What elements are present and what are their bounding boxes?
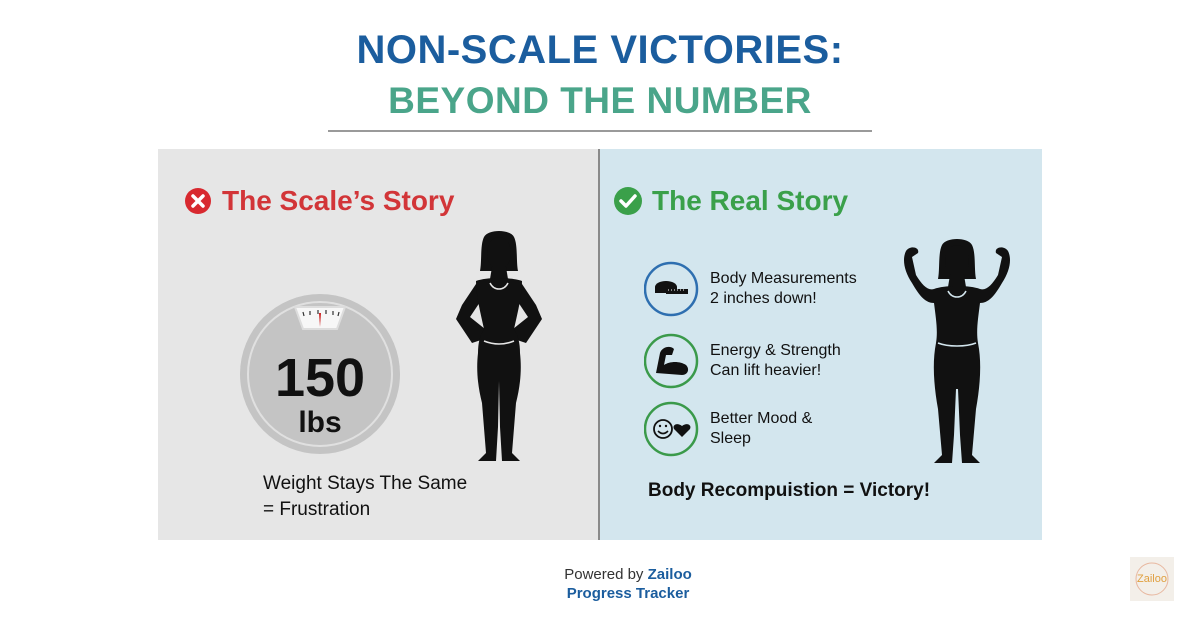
subtitle: BEYOND THE NUMBER [388,80,812,121]
footer: powered by [564,566,692,602]
panel: scale's story [158,149,598,540]
item: measurements [644,262,857,316]
scale dial [240,294,400,454]
caption: weight same: = Frustration [263,499,370,520]
item: mood: Sleep [710,430,751,447]
icon: x [185,188,211,214]
logo [1130,557,1174,601]
item: mood: Better Mood & [710,410,812,427]
item: strength: Energy & Strength [710,342,841,359]
footer: powered by: Progress Tracker [567,585,689,602]
icon: smile heart [644,402,698,456]
footer: powered by: Powered by Zailoo [564,566,692,583]
logo: Zailoo [1137,573,1167,585]
heading: scale's story: The Scale’s Story [222,185,454,216]
title: NON-SCALE VICTORIES: [356,28,844,72]
item: strength: Can lift heavier! [710,362,821,379]
figure: flexing [904,239,1010,463]
caption: weight same [263,473,467,520]
figure: hands on hips [456,231,542,461]
scale dial: 150 [275,348,365,408]
caption: victory: Body Recompuistion = Victory! [648,480,930,501]
scale dial: lbs [298,406,342,439]
item: measurements: Body Measurements [710,270,857,287]
icon: check [614,187,642,215]
panel: real story [600,149,1042,540]
item: mood [644,402,812,456]
item: strength [644,334,841,388]
item: measurements: 2 inches down! [710,290,817,307]
caption: weight same: Weight Stays The Same [263,473,467,494]
icon: tape measure [644,262,698,316]
heading: real story: The Real Story [652,185,848,216]
icon: flexed arm [644,334,698,388]
